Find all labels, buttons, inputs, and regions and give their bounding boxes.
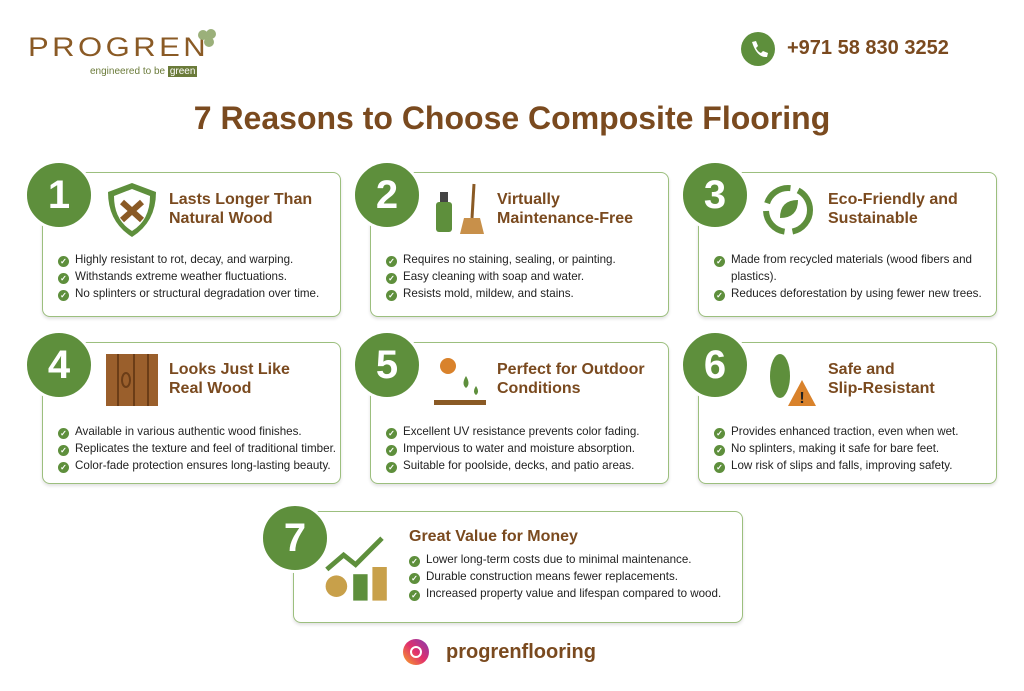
card 1 <box>27 163 342 320</box>
card 6: Slip-Resistant <box>828 380 935 397</box>
card 7: Durable construction means fewer replacements. <box>426 570 678 583</box>
icon: shoe and warning: ! <box>799 390 805 407</box>
card 3: 3 <box>704 173 726 217</box>
icon: wood <box>106 354 158 406</box>
card 2: Requires no staining, sealing, or painting. <box>403 253 616 266</box>
card 2 <box>355 163 670 320</box>
card 7 <box>263 506 744 626</box>
logo: engineered to be green <box>90 66 195 77</box>
card 7: Increased property value and lifespan compared to wood. <box>426 587 721 600</box>
logo: PROGREN <box>28 32 209 62</box>
card 6: Provides enhanced traction, even when wet. <box>731 425 959 438</box>
card 5: Impervious to water and moisture absorption. <box>403 442 635 455</box>
card 5: Excellent UV resistance prevents color fading. <box>403 425 640 438</box>
card 1: Withstands extreme weather fluctuations. <box>75 270 287 283</box>
card 3: Made from recycled materials (wood fibers and <box>731 253 972 266</box>
card 2: Resists mold, mildew, and stains. <box>403 287 574 300</box>
card 6: Low risk of slips and falls, improving safety. <box>731 459 952 472</box>
card 6 <box>683 333 998 487</box>
card 3 <box>683 163 998 320</box>
card 6: 6 <box>704 343 726 387</box>
card 5: 5 <box>376 343 398 387</box>
logo <box>28 29 216 77</box>
card 1: Natural Wood <box>169 210 273 227</box>
card 2: Virtually <box>497 191 560 208</box>
card 4: Available in various authentic wood finishes. <box>75 425 302 438</box>
icon: recycle leaf <box>763 185 813 235</box>
card 7: Lower long-term costs due to minimal maintenance. <box>426 553 692 566</box>
card 1: 1 <box>48 173 70 217</box>
card 1: Lasts Longer Than <box>169 191 312 208</box>
card 4: Color-fade protection ensures long-lasting beauty. <box>75 459 331 472</box>
card 3: Reduces deforestation by using fewer new trees. <box>731 287 982 300</box>
phone <box>741 32 949 66</box>
card 2: Maintenance-Free <box>497 210 633 227</box>
card 5 <box>355 333 670 487</box>
card 6: Safe and <box>828 361 895 378</box>
card 7: Great Value for Money <box>409 528 578 545</box>
title: 7 Reasons to Choose Composite Flooring <box>194 100 830 136</box>
card 4 <box>27 333 342 487</box>
icon: sun and rain <box>434 358 486 405</box>
card 3: Eco-Friendly and <box>828 191 958 208</box>
card 4: Looks Just Like <box>169 361 290 378</box>
card 6: No splinters, making it safe for bare feet. <box>731 442 939 455</box>
card 4: Replicates the texture and feel of traditional timber. <box>75 442 336 455</box>
card 1: No splinters or structural degradation over time. <box>75 287 319 300</box>
instagram handle: progrenflooring <box>446 641 596 663</box>
icon: shoe and warning <box>770 354 816 407</box>
card 3: Sustainable <box>828 210 918 227</box>
card 7: 7 <box>284 516 306 560</box>
card 3: plastics). <box>731 270 777 283</box>
card 5: Suitable for poolside, decks, and patio areas. <box>403 459 634 472</box>
card 5: Conditions <box>497 380 581 397</box>
card 4: 4 <box>48 343 70 387</box>
icon: cleaning <box>436 184 484 234</box>
icon: coins and arrow <box>325 536 387 601</box>
card 4: Real Wood <box>169 380 251 397</box>
card 2: 2 <box>376 173 398 217</box>
card 5: Perfect for Outdoor <box>497 361 645 378</box>
card 2: Easy cleaning with soap and water. <box>403 270 584 283</box>
phone: +971 58 830 3252 <box>787 37 949 59</box>
instagram handle <box>403 639 596 665</box>
card 1: Highly resistant to rot, decay, and warping. <box>75 253 293 266</box>
icon: shield <box>108 183 156 237</box>
